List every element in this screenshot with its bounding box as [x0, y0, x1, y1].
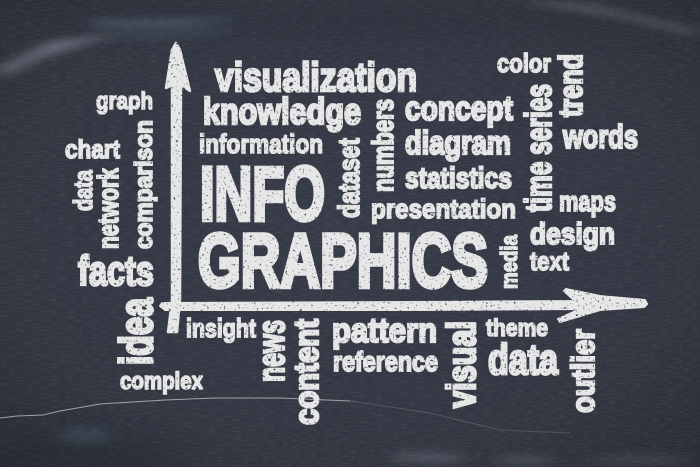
vertical word: data: data: [68, 170, 98, 211]
vertical word: comparison: comparison: [130, 120, 158, 249]
word: text: text: [530, 246, 569, 276]
horizontal arrow: [160, 289, 647, 322]
vertical word: media: media: [496, 235, 522, 289]
word: information: information: [199, 129, 323, 159]
word: facts: facts: [78, 247, 154, 294]
word: chart: chart: [65, 134, 120, 164]
vertical word: trend: trend: [552, 54, 589, 117]
word: statistics: statistics: [405, 162, 512, 195]
vertical word: numbers: numbers: [367, 99, 400, 192]
heading: GRAPHICS: GRAPHICS: [198, 219, 488, 304]
word: reference: reference: [333, 346, 438, 377]
word: color: color: [497, 48, 551, 78]
heading: INFO: INFO: [200, 152, 325, 237]
vertical word: idea: idea: [110, 298, 162, 365]
word cloud: [65, 48, 638, 425]
chalk smudge: bottom edge: [59, 426, 690, 465]
word: theme: theme: [486, 315, 548, 342]
vertical word: network: network: [93, 167, 125, 249]
word: insight: insight: [186, 313, 256, 343]
word: complex: complex: [120, 368, 204, 395]
chalk smudge: top right: [520, 0, 700, 36]
word: data (large): data: [488, 336, 559, 384]
word: design: design: [530, 216, 615, 251]
word: concept: concept: [405, 90, 513, 128]
vertical word: visual: visual: [440, 321, 484, 408]
vertical arrow: [166, 43, 190, 332]
word: pattern: pattern: [332, 312, 437, 350]
crack line in slate: [0, 398, 570, 433]
vertical word: dataset: dataset: [333, 138, 366, 218]
vertical word: content: content: [288, 319, 326, 425]
word: presentation: presentation: [371, 194, 516, 224]
word: maps: maps: [559, 186, 616, 218]
word: visualization: visualization: [215, 54, 417, 100]
axis arrows: [160, 43, 647, 332]
vertical word: news: news: [251, 320, 293, 382]
vertical word: time series: time series: [518, 84, 559, 212]
word: graph: graph: [96, 88, 153, 115]
word: diagram: diagram: [405, 124, 511, 161]
word: knowledge: knowledge: [203, 91, 361, 132]
word: words: words: [562, 118, 638, 155]
vertical word: outlier: outlier: [565, 329, 601, 413]
chalk smudge: top left: [0, 18, 240, 78]
